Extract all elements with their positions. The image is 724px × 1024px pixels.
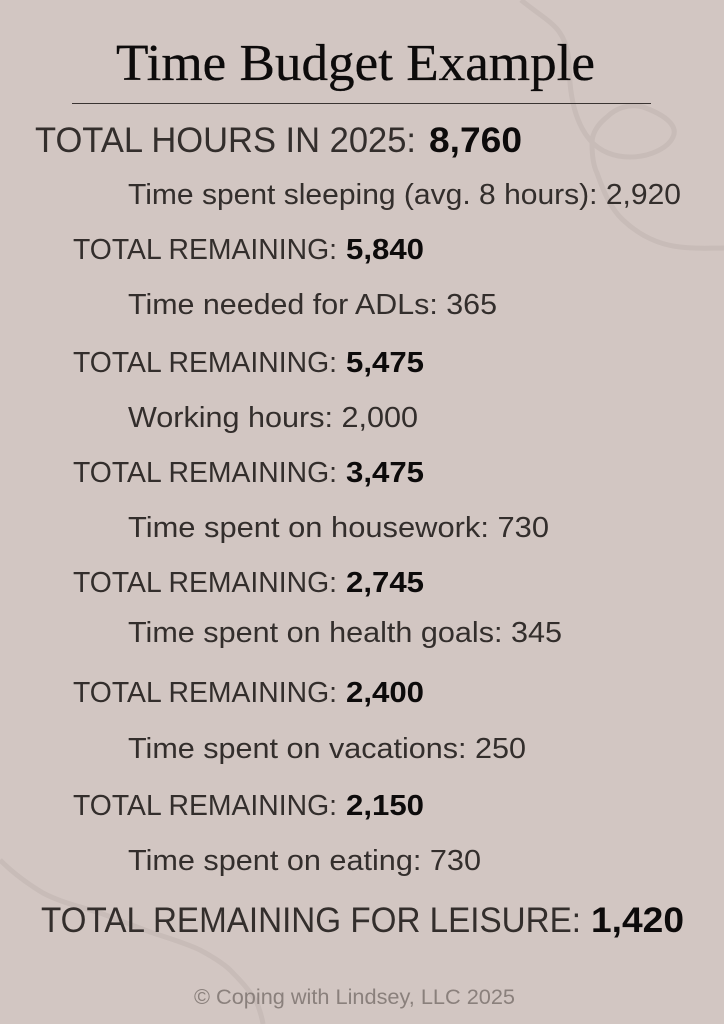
- decorative swirl: bottom left: [0, 860, 263, 1024]
- remaining: 2,150: TOTAL REMAINING:: [73, 790, 337, 822]
- remaining: 5,840: 5,840: [346, 234, 424, 266]
- total remaining for leisure: 1,420: [591, 901, 684, 940]
- total hours row: TOTAL HOURS IN 2025:: [35, 121, 416, 160]
- decorative swirl: top right: [521, 0, 724, 248]
- item: working hours: Working hours: 2,000: [128, 402, 418, 434]
- remaining: 5,475: TOTAL REMAINING:: [73, 347, 337, 379]
- item: eating: Time spent on eating: 730: [128, 845, 481, 877]
- remaining: 2,745: 2,745: [346, 567, 424, 599]
- title: Time Budget Example: [116, 35, 595, 92]
- remaining: 2,745: TOTAL REMAINING:: [73, 567, 337, 599]
- remaining: 5,475: 5,475: [346, 347, 424, 379]
- item: ADLs: Time needed for ADLs: 365: [128, 289, 497, 321]
- item: housework: Time spent on housework: 730: [128, 512, 549, 544]
- total remaining for leisure: TOTAL REMAINING FOR LEISURE:: [41, 901, 581, 940]
- remaining: 2,400: TOTAL REMAINING:: [73, 677, 337, 709]
- copyright footer: © Coping with Lindsey, LLC 2025: [194, 986, 515, 1009]
- remaining: 2,150: 2,150: [346, 790, 424, 822]
- total hours row: 8,760: [429, 121, 522, 160]
- remaining: 3,475: 3,475: [346, 457, 424, 489]
- item: sleeping: Time spent sleeping (avg. 8 hours): 2,920: [128, 179, 681, 211]
- remaining: 2,400: 2,400: [346, 677, 424, 709]
- remaining: 3,475: TOTAL REMAINING:: [73, 457, 337, 489]
- item: health goals: Time spent on health goals: 345: [128, 617, 562, 649]
- title divider: [72, 103, 651, 104]
- remaining: 5,840: TOTAL REMAINING:: [73, 234, 337, 266]
- item: vacations: Time spent on vacations: 250: [128, 733, 526, 765]
